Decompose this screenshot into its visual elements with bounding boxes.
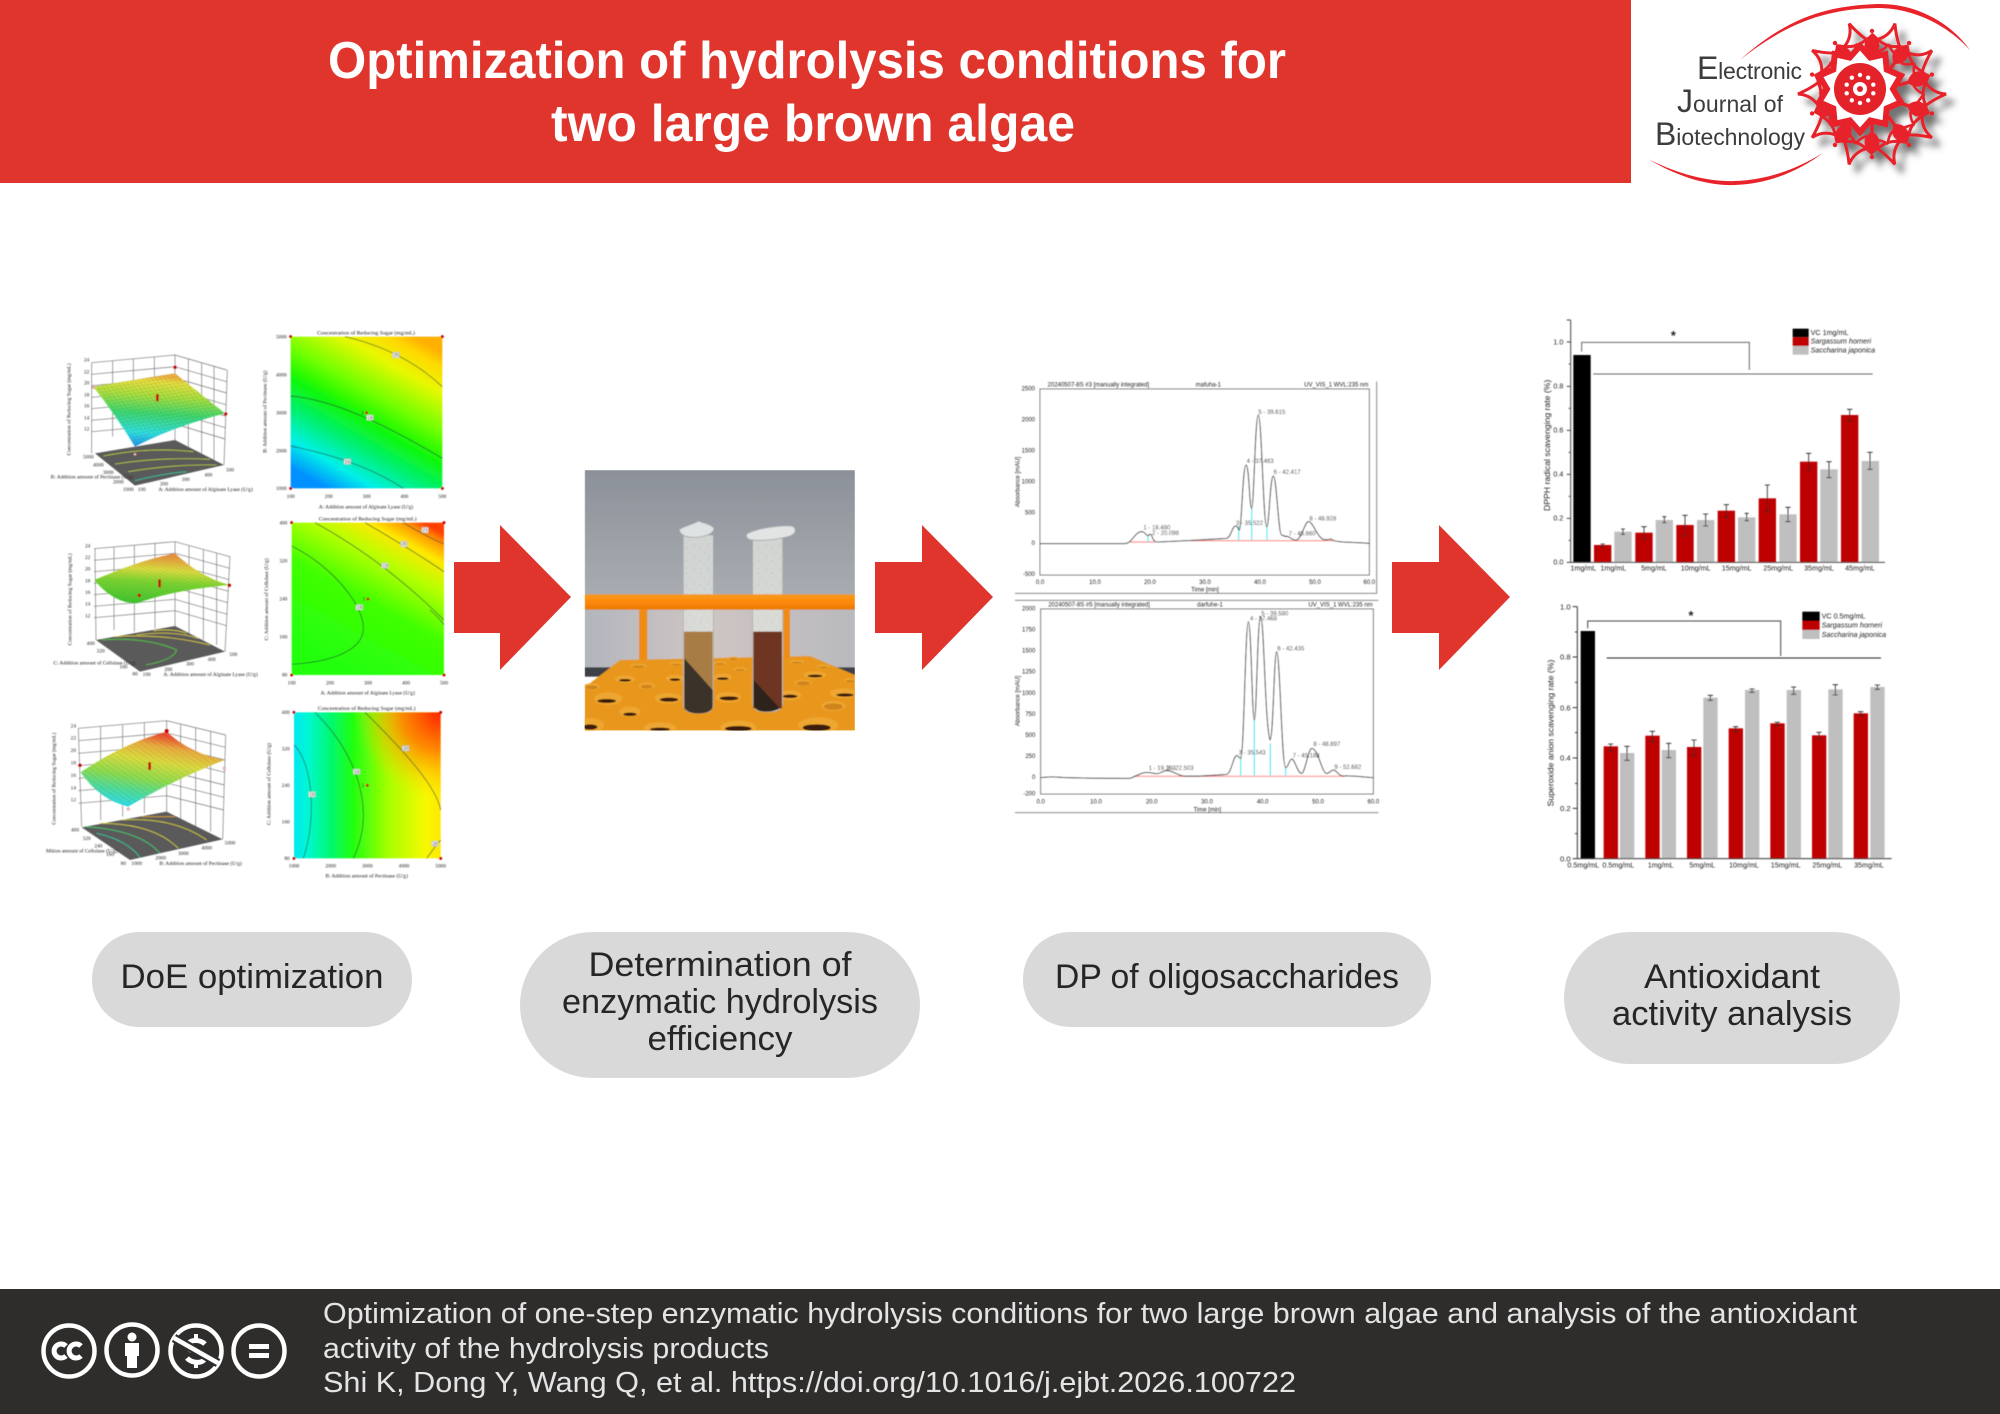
surface plot 1: 16 (84, 404, 90, 410)
bar chart: superoxide: 0.8 (1560, 653, 1571, 662)
chromatogram 1: 60.0 (1364, 580, 1376, 586)
contour plot 2: 19 (382, 563, 388, 569)
contour plot 3: 16 (309, 792, 315, 798)
surface plot 3: 160 (106, 852, 114, 858)
chromatogram 2: 8 - 48.897 (1313, 742, 1341, 748)
chromatogram 1: 0.0 (1036, 580, 1045, 586)
chromatogram 2: 30.0 (1201, 800, 1213, 806)
logo wordmark: Electronic (1697, 50, 1802, 86)
label pill: Antioxidant activity analysis: activity analysis (1612, 995, 1852, 1033)
bar chart: DPPH: 25mg/mL (1763, 564, 1793, 572)
chromatogram 1: mafuha-1 (1196, 383, 1222, 389)
bar chart: superoxide: Sargassum horneri (1822, 622, 1883, 630)
contour plot 2: 300 (364, 681, 372, 687)
bar chart: superoxide: 0.6 (1560, 703, 1571, 712)
bar chart: DPPH: 45mg/mL (1845, 564, 1875, 572)
logo mandala (1795, 17, 1949, 171)
icon: no derivatives (234, 1326, 284, 1376)
label pill: Determination of enzymatic hydrolysis efficiency: enzymatic hydrolysis (562, 983, 878, 1021)
chromatogram 1: 20240507-8S #3 [manually integrated] (1048, 383, 1149, 389)
surface plot 2: 400 (208, 657, 216, 663)
rack hole interiors (586, 658, 854, 710)
contour plot 3: 320 (282, 746, 290, 752)
chromatogram 2: 9 - 52.682 (1334, 765, 1362, 771)
icon: attribution (106, 1324, 158, 1376)
surface plot 3: 400 (71, 828, 79, 834)
surface plot 1: 1000 (123, 487, 134, 493)
chromatogram 1: 1000 (1022, 480, 1036, 486)
bar chart: DPPH: 1mg/mL (1570, 564, 1596, 572)
chromatogram 1: 40.0 (1254, 580, 1266, 586)
bar chart: superoxide: 1mg/mL (1648, 862, 1674, 870)
surface plot 1: 2000 (113, 479, 124, 485)
label pill: Determination of enzymatic hydrolysis efficiency (520, 932, 920, 1078)
chromatogram 2: 1250 (1022, 670, 1036, 676)
bar chart: DPPH (1542, 320, 1885, 572)
surface plot 2: 400 (87, 641, 95, 647)
contour plot 1: 3000 (276, 410, 287, 416)
arrow 3 (1392, 525, 1510, 670)
chromatogram 2: 60.0 (1368, 800, 1380, 806)
surface plot 3: 80 (121, 861, 126, 867)
contour plot 1: 5 (361, 410, 364, 416)
contour plot 2: A: Addition amount of Alginate Lyase (U/g) (320, 690, 415, 697)
surface plot 2: 20 (85, 567, 91, 573)
chromatogram 2: 1500 (1022, 649, 1036, 655)
arrow 2 (875, 525, 993, 670)
chromatogram 1: 30.0 (1199, 580, 1211, 586)
bar chart: DPPH: VC 1mg/mL (1811, 329, 1848, 337)
bar chart: superoxide: 15mg/mL (1771, 862, 1801, 870)
contour plot 1: 18 (367, 415, 373, 421)
chromatogram 2: 750 (1025, 712, 1036, 718)
surface plot 3: 240 (94, 844, 103, 850)
contour plot 2: 20 (401, 542, 407, 548)
journal logo (1648, 4, 1970, 185)
citation text: activity of the hydrolysis products (323, 1333, 769, 1365)
label pill: Antioxidant activity analysis: Antioxidant (1644, 958, 1821, 996)
citation text: Shi K, Dong Y, Wang Q, et al. https://doi.org/10.1016/j.ejbt.2026.100722 (323, 1367, 1296, 1399)
contour plot 3: 160 (282, 820, 290, 826)
contour plot 1: 300 (363, 494, 371, 500)
contour plot 1: 500 (438, 494, 447, 500)
photo: test tubes in orange rack (576, 470, 857, 735)
icon: non-commercial (170, 1326, 222, 1376)
bar chart: superoxide: 0.5mg/mL (1602, 862, 1634, 870)
contour plot 2: 400 (279, 520, 288, 526)
surface plot 1: 400 (204, 473, 213, 479)
surface plot 2: 160 (119, 664, 128, 670)
surface plot 2: 24 (85, 543, 91, 549)
chromatogram 2: 3 - 22.503 (1167, 766, 1194, 772)
contour plot 3: 4000 (399, 864, 410, 870)
bar chart: DPPH: 0.0 (1553, 559, 1563, 567)
chromatogram 2: 1000 (1022, 691, 1036, 697)
contour plot 3 (266, 705, 446, 879)
chromatogram 2: darfuhe-1 (1197, 603, 1223, 609)
rack hole shadows (583, 675, 854, 731)
chromatogram 2: 40.0 (1257, 800, 1269, 806)
contour plot 3: B: Addition amount of Pectinase (U/g) (325, 872, 408, 879)
chromatogram 2: UV_VIS_1 WVL:235 nm (1308, 603, 1373, 609)
surface plot 1: 5000 (83, 454, 94, 460)
chromatogram 2: 2000 (1022, 607, 1036, 613)
surface plot 3: 18 (71, 760, 76, 766)
surface plot 1: Concentration of Reducing Sugar (mg/mL) (66, 363, 73, 455)
contour plot 3: 3000 (362, 864, 373, 870)
chromatogram 2: 0 (1032, 775, 1036, 781)
chromatogram 1: 2500 (1022, 387, 1036, 393)
chromatogram 1: 2 - 20.098 (1152, 531, 1180, 537)
citation text (323, 1298, 1857, 1399)
panel: HPLC chromatograms (1015, 382, 1380, 814)
surface plot 2: 80 (132, 672, 138, 678)
right tube (746, 526, 795, 712)
surface plot 1: A: Addition amount of Alginate Lyase (U/g) (158, 486, 253, 493)
chromatogram 2: 10.0 (1090, 800, 1102, 806)
surface plot 3: 22 (71, 735, 76, 741)
contour plot 1: Concentration of Reducing Sugar (mg/mL) (317, 330, 415, 337)
citation text: Optimization of one-step enzymatic hydrolysis conditions for two large brown algae and analysis of the antioxidant (323, 1298, 1857, 1330)
chromatogram 2: 0.0 (1037, 800, 1045, 806)
surface plot 1: 12 (84, 427, 90, 433)
contour plot 2: 5 (363, 597, 366, 603)
title (328, 32, 1286, 153)
contour plot 3: 5000 (435, 864, 446, 870)
contour plot 2: 18 (357, 605, 362, 611)
title: Optimization of hydrolysis conditions for (328, 32, 1286, 90)
label pill: DoE optimization: DoE optimization (120, 958, 384, 996)
chromatogram 2: 250 (1025, 754, 1036, 760)
label pill: Determination of enzymatic hydrolysis efficiency: efficiency (648, 1020, 792, 1058)
bar chart: DPPH: 10mg/mL (1681, 564, 1711, 572)
bar chart: superoxide: Saccharina japonica (1822, 631, 1886, 639)
surface plot 1: B: Addition amount of Pectinase (U/g) (51, 473, 133, 480)
icon: Creative Commons CC (44, 1326, 94, 1376)
surface plot 1: 300 (182, 477, 190, 483)
contour plot 1: 4000 (276, 372, 287, 378)
surface plot 3: 14 (71, 785, 76, 791)
label pill: Antioxidant activity analysis (1564, 932, 1900, 1064)
bar chart: superoxide: 1.0 (1560, 602, 1571, 611)
contour plot 2: 320 (279, 559, 288, 565)
surface plot 2: 500 (229, 652, 238, 658)
contour plot 2: 160 (279, 635, 288, 641)
bar chart: superoxide: 10mg/mL (1729, 862, 1759, 870)
surface plot 1: 100 (138, 487, 146, 493)
surface plot 3: 24 (71, 723, 76, 729)
chromatogram 1: 3 - 35.522 (1236, 521, 1264, 527)
logo wordmark: Journal of (1677, 83, 1784, 119)
chromatogram 2: 4 - 37.468 (1250, 617, 1278, 623)
chromatogram 1: -500 (1023, 572, 1036, 578)
contour plot 3: Concentration of Reducing Sugar (mg/mL) (318, 705, 416, 712)
surface plot 2: 12 (85, 613, 91, 619)
surface plot 2: 18 (85, 579, 91, 585)
contour plot 1: 16 (345, 459, 350, 465)
chromatogram 2: 20240507-8S #5 [manually integrated] (1048, 603, 1150, 609)
contour plot 1: 200 (325, 494, 333, 500)
chromatogram 1: 2000 (1022, 418, 1036, 424)
contour plot 3: 400 (282, 710, 290, 716)
contour plot 3: 2000 (325, 864, 336, 870)
contour plot 2: Concentration of Reducing Sugar (mg/mL) (319, 516, 417, 523)
chromatogram 2: 3 - 35.543 (1239, 750, 1266, 756)
surface plot 2: 14 (85, 602, 91, 608)
arrow 1 (454, 525, 571, 670)
chromatogram 1: 8 - 48.928 (1309, 517, 1337, 523)
surface plot 1: 24 (84, 358, 90, 364)
contour plot 2: 500 (440, 681, 448, 687)
contour plot 3: C: Addition amount of Cellulase (U/g) (266, 743, 273, 825)
surface plot 2: 300 (186, 662, 194, 668)
surface plot 3: Concentration of Reducing Sugar (mg/mL) (50, 732, 57, 825)
contour plot 3: 240 (282, 783, 290, 789)
bench edge (585, 667, 855, 677)
label pill: DoE optimization (92, 932, 412, 1027)
chromatogram 2: 500 (1025, 733, 1036, 739)
contour plot 3: 5 (362, 783, 365, 789)
footer bar (0, 1289, 2000, 1414)
label pill: Determination of enzymatic hydrolysis efficiency: Determination of (588, 946, 852, 984)
contour plot 3: 1000 (289, 864, 300, 870)
contour plot 1 (262, 330, 447, 510)
bar chart: DPPH: DPPH radical scavenging rate (%) (1542, 380, 1552, 511)
surface plot 2: 200 (164, 667, 173, 673)
bar chart: superoxide (1545, 602, 1892, 870)
chromatogram 1 (1015, 382, 1377, 594)
bar chart: superoxide: Superoxide anion scavenging rate (%) (1545, 660, 1555, 806)
bar chart: DPPH: 0.8 (1553, 383, 1563, 391)
surface plot 3 (46, 721, 242, 867)
bar chart: DPPH: 35mg/mL (1804, 564, 1834, 572)
chromatogram 2: 1750 (1022, 628, 1036, 634)
contour plot 1: 100 (287, 494, 295, 500)
chromatogram 1: 10.0 (1089, 580, 1101, 586)
contour plot 2: 200 (326, 681, 334, 687)
chromatogram 1: 500 (1025, 511, 1036, 517)
bar chart: DPPH: 1.0 (1553, 338, 1563, 346)
chromatogram 2: 20.0 (1146, 800, 1158, 806)
logo wordmark (1655, 50, 1806, 152)
chromatogram 1: 50.0 (1309, 580, 1321, 586)
bar chart: superoxide: 0.5mg/mL (1567, 862, 1599, 870)
contour plot 2 (263, 516, 448, 697)
bar chart: DPPH: Sargassum horneri (1811, 338, 1872, 346)
logo wordmark: Biotechnology (1655, 116, 1806, 152)
contour plot 3: 20 (403, 746, 409, 752)
surface plot 3: 2000 (155, 856, 166, 862)
contour plot 3: 20 (432, 841, 438, 847)
surface plot 3: 320 (83, 836, 91, 842)
surface plot 1 (51, 355, 253, 493)
rack rail (585, 594, 855, 610)
chromatogram 1: 6 - 42.417 (1274, 470, 1301, 476)
rack hole rims (576, 657, 857, 735)
bar chart: superoxide: 0.2 (1560, 804, 1571, 813)
chromatogram 1: 7 - 45.660 (1289, 532, 1316, 538)
contour plot 2: 400 (402, 681, 410, 687)
surface plot 3: B: Addition amount of Pectinase (U/g) (159, 860, 242, 867)
chromatogram 2: 5 - 39.580 (1261, 612, 1289, 618)
surface plot 1: 4000 (93, 462, 104, 468)
chromatogram 2 (1015, 600, 1380, 814)
bar chart: DPPH: 0.4 (1553, 471, 1563, 479)
chromatogram 2: Absorbance [mAU] (1015, 676, 1021, 726)
surface plot 2: 320 (97, 648, 105, 654)
label pill: DP of oligosaccharides (1023, 932, 1431, 1027)
contour plot 2: C: Addition amount of Cellulase (U/g) (263, 558, 270, 640)
contour plot 2: 240 (279, 597, 288, 603)
surface plot 1: 500 (226, 468, 234, 474)
surface plot 1: 14 (84, 415, 90, 421)
wall below rail (584, 608, 855, 668)
contour plot 1: 400 (400, 494, 409, 500)
bar chart: DPPH: 0.2 (1553, 515, 1563, 523)
surface plot 3: Mition amount of Cellulase (U/g) (46, 847, 118, 854)
bar chart: superoxide: VC 0.5mg/mL (1822, 612, 1865, 620)
bar chart: DPPH: 15mg/mL (1722, 564, 1752, 572)
surface plot 1: 22 (84, 369, 90, 375)
panel: DoE response surface plots (46, 330, 448, 879)
chromatogram 1: 1500 (1022, 449, 1036, 455)
wall background (585, 470, 855, 595)
chromatogram 1: Absorbance [mAU] (1015, 457, 1021, 507)
contour plot 1: 5000 (276, 334, 287, 340)
bar chart: DPPH: * (1671, 329, 1676, 343)
bar chart: superoxide: 35mg/mL (1854, 862, 1884, 870)
surface plot 1: 18 (84, 392, 90, 398)
bar chart: superoxide: 0.4 (1560, 754, 1571, 763)
surface plot 3: 1000 (131, 861, 142, 867)
surface plot 1: 3000 (103, 470, 114, 476)
bar chart: superoxide: 5mg/mL (1689, 862, 1715, 870)
bar chart: DPPH: Saccharina japonica (1811, 346, 1875, 354)
surface plot 1: 20 (84, 381, 90, 387)
panel: antioxidant bar charts (1542, 320, 1892, 870)
surface plot 2: 100 (143, 672, 151, 678)
rail supports (639, 608, 790, 660)
surface plot 3: 20 (71, 748, 76, 754)
surface plot 3: 16 (71, 773, 76, 779)
bar chart: DPPH: 5mg/mL (1641, 564, 1667, 572)
contour plot 1: B: Addition amount of Pectinase (U/g) (262, 370, 269, 453)
title: two large brown algae (551, 95, 1075, 153)
left tube (679, 521, 714, 713)
bar chart: DPPH: 0.6 (1553, 427, 1563, 435)
chromatogram 2: Time [min] (1193, 808, 1222, 814)
chromatogram 2: 6 - 42.435 (1277, 646, 1305, 652)
chromatogram 1: UV_VIS_1 WVL:235 nm (1304, 383, 1368, 389)
header banner (0, 0, 1631, 183)
chromatogram 1: Time [min] (1191, 588, 1219, 594)
surface plot 2: C: Addition amount of Cellulase (U/g) (53, 659, 136, 666)
chromatogram 2: 1 - 19.183 (1149, 766, 1176, 772)
chromatogram 1: 1 - 18.480 (1143, 526, 1171, 532)
chromatogram 1: 5 - 39.615 (1258, 410, 1286, 416)
logo swoosh arcs (1648, 4, 1970, 185)
surface plot 2 (53, 542, 258, 678)
surface plot 2: 16 (85, 590, 91, 596)
contour plot 1: 1000 (276, 486, 287, 492)
surface plot 3: 5000 (225, 840, 236, 846)
bar chart: superoxide: 25mg/mL (1812, 862, 1842, 870)
bar chart: superoxide: * (1689, 609, 1694, 623)
contour plot 1: 2000 (276, 448, 287, 454)
chromatogram 1: 4 - 37.463 (1247, 459, 1274, 465)
label pill: DP of oligosaccharides: DP of oligosaccharides (1055, 958, 1399, 996)
rack top (585, 656, 855, 731)
contour plot 1: 20 (393, 353, 399, 359)
chromatogram 1: 20.0 (1144, 580, 1156, 586)
bar chart: superoxide: 0.0 (1560, 854, 1571, 863)
surface plot 3: 4000 (201, 845, 212, 851)
surface plot 3: 12 (71, 798, 76, 804)
contour plot 3: 18 (354, 769, 360, 775)
chromatogram 2: 7 - 45.188 (1293, 754, 1320, 760)
chromatogram 2: 50.0 (1312, 800, 1324, 806)
bar chart: DPPH: 1mg/mL (1600, 564, 1626, 572)
surface plot 2: Concentration of Reducing Sugar (mg/mL) (66, 553, 73, 645)
contour plot 1: A: Addition amount of Alginate Lyase (U/g) (319, 503, 413, 510)
contour plot 2: 100 (288, 681, 296, 687)
contour plot 3: 80 (284, 856, 290, 862)
surface plot 3: 3000 (178, 851, 189, 857)
contour plot 2: 21 (422, 528, 428, 534)
surface plot 2: 22 (85, 555, 91, 561)
contour plot 2: 80 (282, 673, 288, 679)
surface plot 2: A: Addition amount of Alginate Lyase (U/g) (163, 671, 258, 678)
chromatogram 1: 0 (1032, 541, 1036, 547)
surface plot 1: 200 (160, 482, 168, 488)
chromatogram 2: -200 (1023, 792, 1036, 798)
